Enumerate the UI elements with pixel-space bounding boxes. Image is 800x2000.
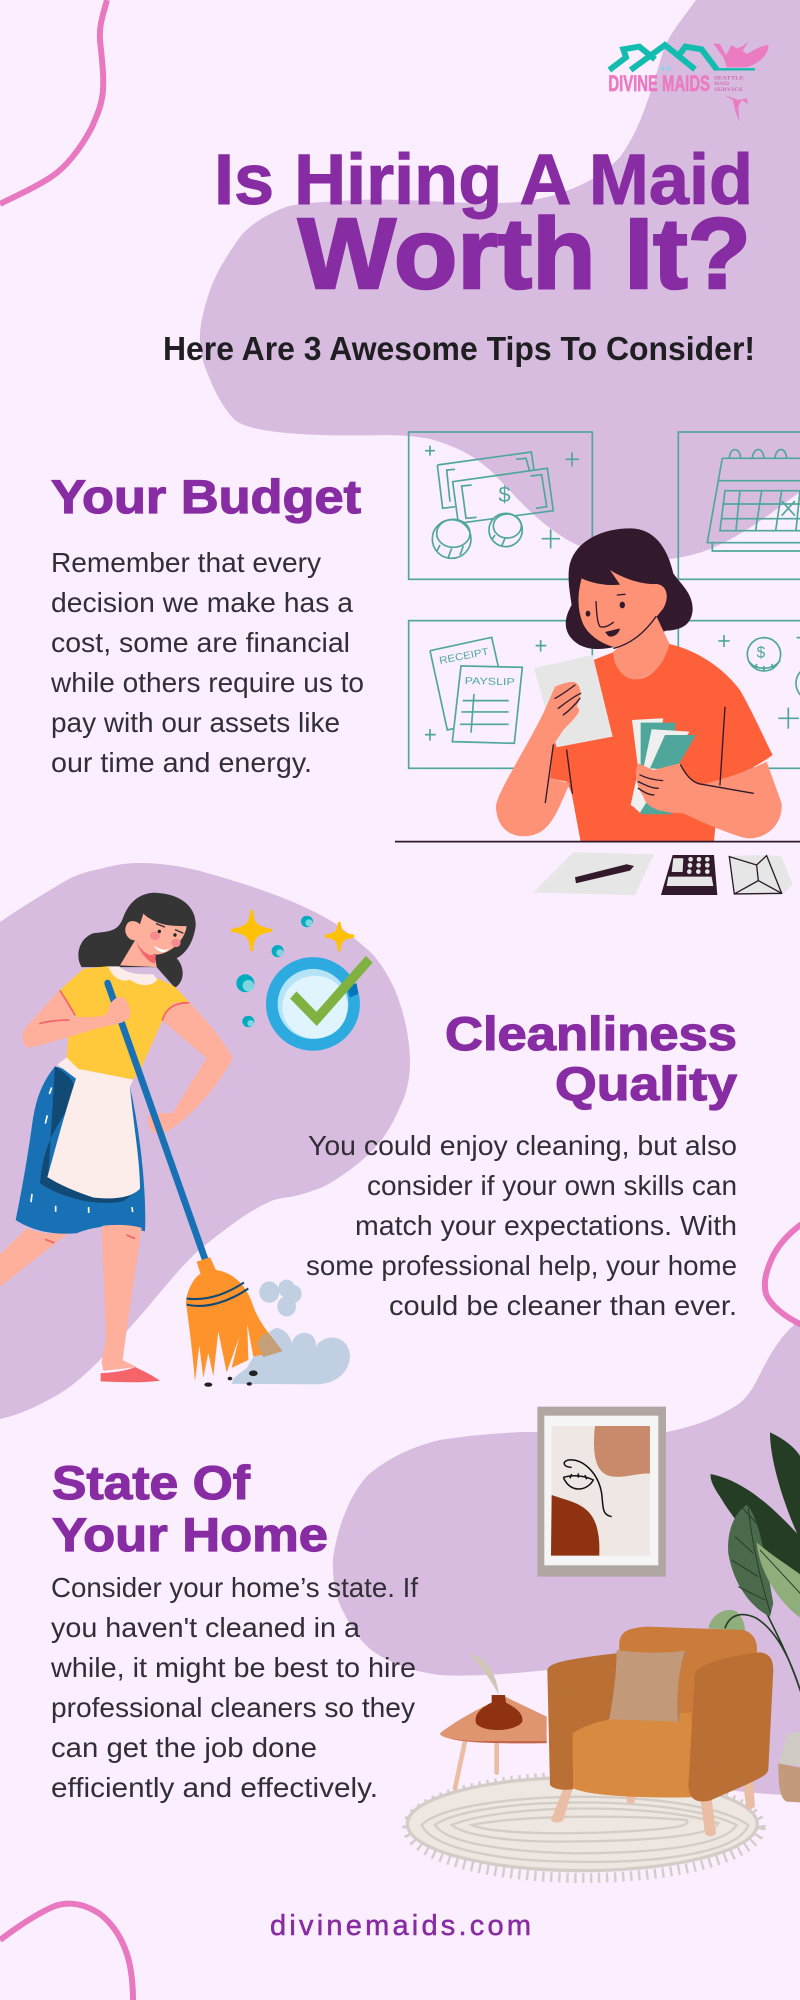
panel: money: $ <box>498 482 511 507</box>
logo tagline: SERVICE <box>714 87 744 93</box>
armchair <box>547 1627 773 1836</box>
icon: fairy <box>713 42 768 122</box>
body: cleanliness quality: could be cleaner than ever. <box>389 1290 737 1321</box>
side table <box>440 1697 547 1788</box>
body: your budget <box>50 547 364 778</box>
logo tagline: MAID <box>714 81 729 87</box>
heading: cleanliness quality: Quality <box>555 1057 737 1110</box>
woman left arm <box>496 682 580 836</box>
woman right arm <box>636 762 782 838</box>
title line 2: Worth It? <box>298 198 751 310</box>
body: cleanliness quality: match your expectations. With <box>355 1210 737 1241</box>
skirt highlights <box>31 1087 133 1213</box>
woman face <box>120 914 187 967</box>
body: your budget: pay with our assets like <box>51 707 340 738</box>
heading: your budget: Your Budget <box>51 470 361 523</box>
body: state of your home: Consider your home’s state. If <box>51 1572 418 1603</box>
illustration: living room <box>407 1407 800 1878</box>
body: cleanliness quality: You could enjoy cleaning, but also <box>308 1130 737 1161</box>
body: your budget: decision we make has a <box>51 587 353 618</box>
woman neck and face <box>578 570 670 679</box>
body: state of your home <box>50 1572 418 1803</box>
logo: Divine Maids <box>608 42 768 122</box>
icon: check badge <box>266 957 369 1051</box>
panel: coins: $ <box>757 644 766 661</box>
woman hair <box>78 893 196 988</box>
subtitle: Here Are 3 Awesome Tips To Consider! <box>163 330 755 367</box>
illustration: woman with budget <box>395 432 800 895</box>
woman shirt <box>550 644 773 842</box>
woman hair <box>566 528 693 649</box>
broom dust overlap <box>257 1333 283 1357</box>
apron <box>47 1057 140 1198</box>
plant pot <box>778 1732 800 1803</box>
desk line <box>395 839 800 844</box>
skirt shadow <box>40 1066 133 1203</box>
panel: receipts <box>409 621 592 768</box>
decorative curve: bottom left <box>0 1904 133 2000</box>
logo wordmark: DIVINE MAIDS <box>608 71 710 96</box>
body: state of your home: can get the job done <box>51 1732 317 1763</box>
body: your budget: while others require us to <box>50 667 364 698</box>
broom handle <box>108 983 206 1262</box>
body: your budget: cost, some are financial <box>51 627 350 658</box>
arm and shirt lines <box>545 685 753 803</box>
woman front leg and shoe <box>101 1225 160 1382</box>
heading: cleanliness quality: Cleanliness <box>445 1007 737 1060</box>
panel: receipts: RECEIPT <box>438 647 490 667</box>
illustration: woman sweeping <box>0 893 369 1387</box>
wall art <box>537 1407 666 1577</box>
woman left arm <box>22 990 130 1047</box>
woman right arm <box>148 1002 233 1134</box>
woman skirt <box>16 1066 145 1234</box>
dust cloud <box>232 1280 350 1384</box>
rug <box>407 1777 761 1878</box>
panel: calendar <box>678 432 800 579</box>
body: state of your home: while, it might be best to hire <box>50 1652 416 1683</box>
banknotes <box>631 718 696 814</box>
plant <box>708 1432 800 1700</box>
icon: calculator <box>661 855 717 895</box>
heading: state of your home <box>52 1456 328 1561</box>
broom bands <box>187 1282 248 1306</box>
icon: teal roofline <box>609 45 755 70</box>
body: state of your home: you haven't cleaned in a <box>51 1612 360 1643</box>
sleeve trim <box>39 990 189 1243</box>
footer website: divinemaids.com <box>270 1910 531 1942</box>
woman collar <box>108 966 157 985</box>
body: cleanliness quality: consider if your own skills can <box>367 1170 737 1201</box>
icon: sparkles <box>231 910 354 951</box>
icon: envelope <box>729 855 793 895</box>
title <box>214 141 753 310</box>
body: cleanliness quality: some professional help, your home <box>306 1250 737 1281</box>
body: your budget: Remember that every <box>51 547 321 578</box>
decorative curve: right <box>765 1224 800 1325</box>
title line 1: Is Hiring A Maid <box>214 141 753 220</box>
background blob: middle <box>0 863 410 1419</box>
section 1 text: your budget <box>50 470 364 778</box>
heading: cleanliness quality <box>445 1007 737 1110</box>
body: state of your home: professional cleaners so they <box>51 1692 415 1723</box>
woman back leg <box>0 1228 68 1287</box>
logo tagline: SEATTLE <box>714 76 744 82</box>
heading: state of your home: Your Home <box>52 1508 328 1561</box>
icon: droplets <box>660 65 672 71</box>
section 3 text: state of your home <box>50 1456 418 1803</box>
paper in hand <box>534 655 613 747</box>
body: cleanliness quality <box>306 1130 737 1321</box>
icon: paper and pen <box>533 852 654 895</box>
background blob: top <box>200 0 800 560</box>
icon: bubbles <box>236 916 313 1027</box>
broom head <box>186 1257 283 1381</box>
woman face details <box>586 594 656 648</box>
dirt specks <box>204 1370 258 1387</box>
panel: money <box>409 432 592 579</box>
panel: coins <box>678 621 800 768</box>
body: state of your home: efficiently and effectively. <box>51 1772 378 1803</box>
heading: state of your home: State Of <box>52 1456 250 1509</box>
decorative curve: top left <box>0 0 107 204</box>
section 2 text: cleanliness quality <box>306 1007 737 1321</box>
vase <box>469 1653 522 1730</box>
body: your budget: our time and energy. <box>51 747 312 778</box>
background blob: bottom <box>333 1320 800 1795</box>
woman yellow shirt <box>59 966 189 1080</box>
panel: receipts: PAYSLIP <box>465 676 515 688</box>
logo tagline <box>714 76 744 93</box>
